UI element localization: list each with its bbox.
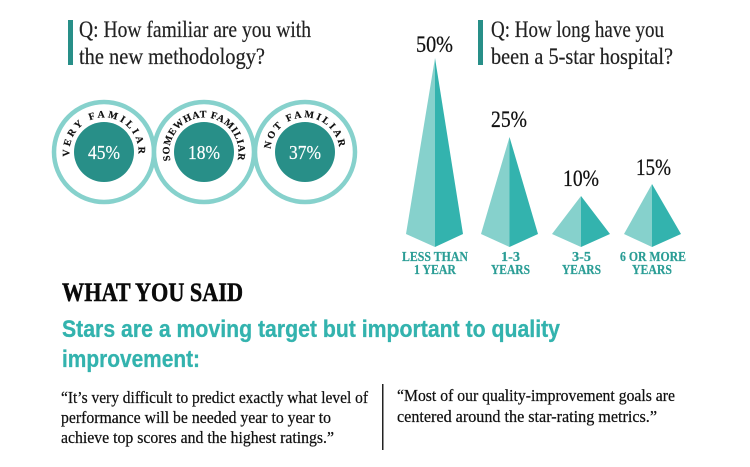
- quote: left: “It’s very difficult to predict exactly what level of: [61, 388, 368, 407]
- donut: somewhat familiar 18%: SOMEWHAT FAMILIAR: [162, 110, 246, 161]
- pyramid: 6 or more years 15%: 15%: [636, 155, 671, 180]
- accent bar: familiarity question: [68, 20, 73, 65]
- quote: right: “Most of our quality-improvement goals are: [397, 386, 675, 405]
- donut: very familiar 45%: 45%: [88, 142, 120, 164]
- pyramid: less than 1 year 50%: LESS THAN: [402, 249, 468, 264]
- quote: right: [397, 386, 675, 426]
- donut: not familiar 37%: 37%: [289, 142, 321, 164]
- heading: what you said: WHAT YOU SAID: [62, 278, 243, 307]
- quote: left: performance will be needed year to year to: [61, 408, 331, 427]
- pyramid: less than 1 year 50%: 50%: [416, 32, 453, 57]
- heading: familiarity question: [79, 17, 311, 69]
- donut: not familiar 37%: NOT FAMILIAR: [264, 110, 345, 149]
- donut: very familiar 45%: [52, 100, 154, 204]
- heading: duration question: been a 5-star hospital?: [491, 44, 673, 69]
- pyramid: 3-5 years 10%: 3-5: [572, 249, 591, 264]
- pyramid: 3-5 years 10%: 10%: [563, 166, 599, 191]
- panel: familiarity question: [52, 17, 358, 204]
- pyramid: 3-5 years 10%: [552, 166, 610, 277]
- heading: familiarity question: Q: How familiar are you with: [79, 17, 311, 42]
- donut: somewhat familiar 18%: [152, 100, 254, 204]
- pyramid: 6 or more years 15%: [620, 155, 686, 277]
- pyramid: 6 or more years 15%: 6 OR MORE: [620, 249, 686, 264]
- pyramid: 1-3 years 25%: YEARS: [491, 262, 530, 277]
- donut: very familiar 45%: VERY FAMILIAR: [62, 110, 146, 156]
- heading: familiarity question: the new methodology?: [79, 44, 265, 69]
- pyramid: 1-3 years 25%: [481, 107, 538, 277]
- subheading: stars are a moving target: improvement:: [62, 346, 200, 373]
- pyramid: 1-3 years 25%: 1-3: [501, 249, 520, 264]
- subheading: stars are a moving target: Stars are a moving target but important to quality: [62, 316, 561, 343]
- quote: left: achieve top scores and the highest ratings.”: [61, 428, 334, 447]
- quote: right: centered around the star-rating metrics.”: [397, 407, 657, 426]
- panel: 5-star duration question: [402, 17, 686, 277]
- heading: duration question: [491, 17, 673, 69]
- pyramid: 3-5 years 10%: YEARS: [562, 262, 601, 277]
- subheading: stars are a moving target: [62, 316, 561, 373]
- pyramid: less than 1 year 50%: 1 YEAR: [414, 262, 456, 277]
- pyramid: 1-3 years 25%: 25%: [491, 107, 527, 132]
- pyramid: less than 1 year 50%: [402, 32, 468, 277]
- quote: left: [61, 388, 368, 447]
- heading: duration question: Q: How long have you: [491, 17, 664, 42]
- donut: somewhat familiar 18%: 18%: [188, 142, 220, 164]
- pyramid: 6 or more years 15%: YEARS: [632, 262, 672, 277]
- accent bar: duration question: [478, 20, 483, 65]
- donut: not familiar 37%: [254, 100, 358, 204]
